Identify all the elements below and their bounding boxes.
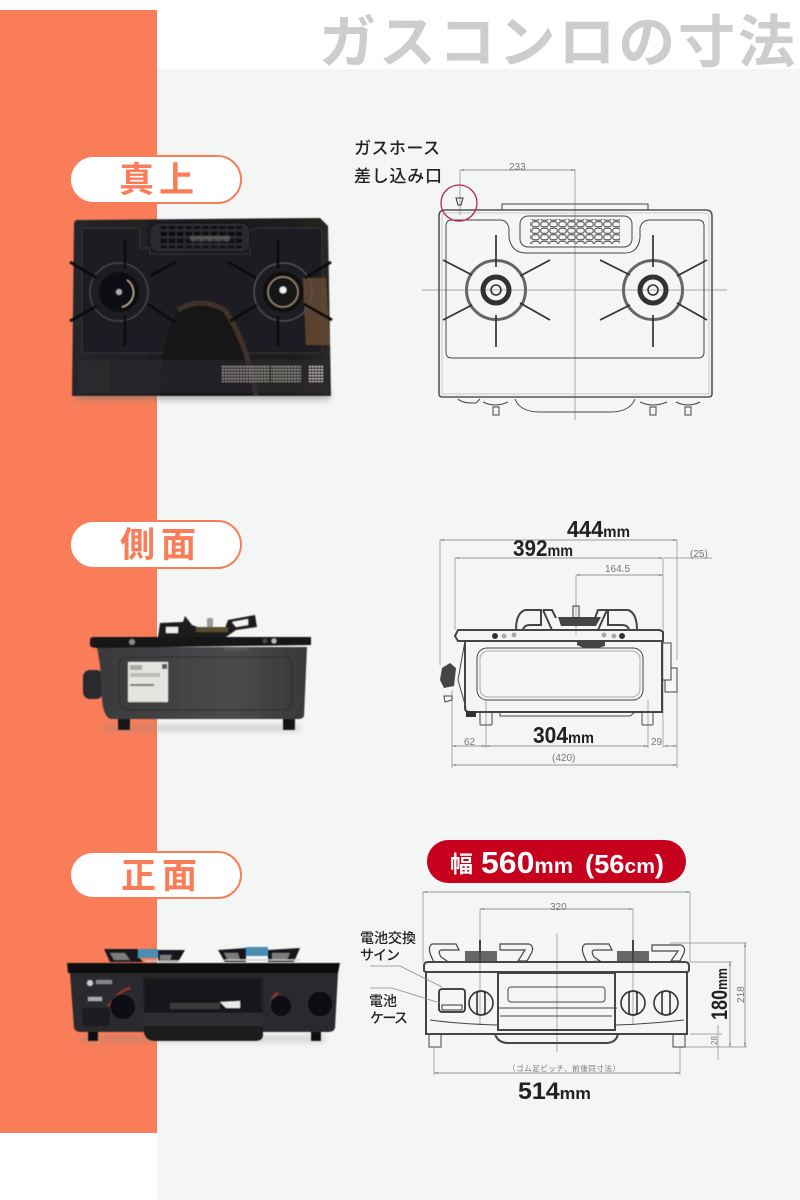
dimension text: 514mm: 514mm: [518, 1078, 591, 1105]
battery case: [439, 989, 465, 1012]
label: gas hose inlet: 差し込み口: [354, 167, 442, 186]
drawing: top view: 233: [509, 162, 526, 173]
red pill: width 560mm: [427, 840, 686, 883]
pill: side view: [70, 521, 241, 568]
dimension text: 392mm: 392mm: [513, 535, 573, 561]
photo: stove front: [67, 947, 340, 1042]
label: battery change sign: [360, 930, 442, 987]
dimension text: 444mm: 444mm: [567, 516, 630, 542]
drawing: front view: （ゴム足ピッチ、前後同寸法）: [508, 1063, 620, 1073]
pill: front view: [70, 852, 241, 898]
pill: top view: 真上: [119, 161, 194, 200]
label: battery change sign: サイン: [360, 947, 400, 963]
pill: front view: 正面: [121, 857, 197, 896]
red pill: width 560mm: 幅: [450, 851, 473, 877]
red pill: width 560mm: 560mm: [481, 845, 573, 880]
red pill: width 560mm: (56cm): [585, 849, 664, 879]
pill: top view: [70, 156, 241, 203]
photo: stove from above: [70, 218, 332, 400]
knobs: [469, 991, 678, 1015]
left burner: [70, 239, 176, 346]
burner right: [600, 235, 707, 347]
right burner: [228, 239, 332, 346]
title: ガスコンロの寸法: [319, 11, 795, 75]
photo: stove side: [83, 615, 311, 731]
background: light panel: [157, 69, 800, 1200]
label: battery case: 電池: [369, 993, 397, 1009]
drawing: side view: 164.5: [605, 564, 630, 575]
background: orange band: [0, 10, 157, 1133]
drawing: top view: [422, 162, 727, 420]
drawing: front view: 320: [550, 902, 567, 913]
drawing: side view: (420): [552, 753, 575, 764]
drawing: side view: [440, 540, 712, 768]
pill: side view: 側面: [120, 526, 196, 565]
label: battery change sign: 電池交換: [360, 930, 416, 946]
label: gas hose inlet: ガスホース: [354, 139, 440, 158]
dimension text: 180mm: 180mm: [707, 968, 732, 1020]
label: gas hose inlet: [354, 139, 442, 186]
label: battery case: ケース: [370, 1010, 408, 1026]
drawing: front view: [423, 892, 747, 1075]
drawing: side view: (25): [690, 549, 708, 560]
drawing: side view: 29: [651, 737, 663, 748]
drawing: front view: 28: [710, 1036, 719, 1045]
dimension text: 304mm: 304mm: [533, 722, 594, 748]
callout: inlet circle: [441, 185, 477, 221]
burner left: [443, 235, 550, 347]
drawing: side view: 62: [464, 737, 476, 748]
label: battery case: [369, 988, 440, 1026]
drawing: front view: 218: [736, 986, 747, 1003]
